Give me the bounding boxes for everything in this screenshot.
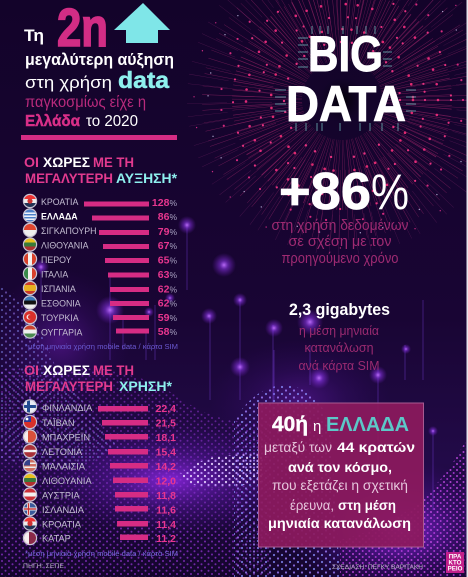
title (24, 0, 174, 130)
big data title (286, 26, 406, 132)
big data title: DATA (286, 76, 406, 132)
dotted wave: right hump (234, 385, 340, 577)
rank headline: 40ή (272, 413, 308, 436)
stat caption (272, 217, 408, 267)
rank description: 44 κρατών (337, 439, 415, 455)
dotted wave: lower left (0, 526, 240, 577)
title: παγκοσμίως είχε η (25, 94, 146, 111)
footnote: growth ranking: *μέση μηνιαία χρήση mobile data / κάρτα SIM (25, 342, 178, 351)
row: Italy (23, 266, 177, 281)
row: Taiwan (23, 415, 176, 430)
row: Italy: ΙΤΑΛΙΑ (41, 270, 68, 280)
row: Croatia: 128% (152, 197, 177, 209)
logo: ΡΕΙΟ (448, 566, 463, 572)
stat: plus 86 percent: % (371, 164, 409, 220)
source: ΠΗΓΗ: ΣΕΠΕ (23, 564, 64, 570)
row: Croatia: ΚΡΟΑΤΙΑ (41, 197, 78, 207)
rank description: που εξετάζει η σχετική (272, 477, 408, 493)
title: το 2020 (86, 113, 138, 130)
row: Lithuania: ΛΙΘΟΥΑΝΙΑ (42, 476, 92, 486)
heading: growth ranking: ΜΕΓΑΛΥΤΕΡΗ (25, 171, 113, 186)
heading: growth ranking: ΟΙ (24, 155, 39, 170)
row: Austria (23, 487, 176, 502)
row: Lithuania: 12,0 (156, 476, 176, 488)
row: Bahrain: ΜΠΑΧΡΕΪΝ (42, 432, 90, 442)
title: στη χρήση (25, 73, 112, 92)
heading: usage ranking: ΜΕ ΤΗ (93, 363, 134, 378)
row: Taiwan: 21,5 (156, 418, 176, 430)
row: Singapore: 79% (158, 226, 177, 238)
heading: growth ranking: ΑΥΞΗΣΗ* (116, 171, 178, 186)
icon: up arrow (114, 3, 170, 43)
row: Lithuania (23, 237, 177, 252)
row: Iceland: 11,6 (156, 504, 176, 516)
dotted wave: right rising (340, 440, 466, 577)
dotted wave: bright streak (180, 453, 262, 487)
starburst rays and dots (194, 0, 468, 248)
row: Italy: 63% (158, 269, 177, 281)
row: Iceland (23, 502, 176, 516)
gigabytes caption: η μέση μηνιαία (299, 323, 379, 338)
rank description: έρευνα, (290, 497, 334, 513)
rank description: μηνιαία κατανάλωση (268, 515, 411, 531)
title: data (118, 67, 169, 93)
title: Ελλάδα (25, 113, 80, 130)
chart: usage ranking (23, 399, 176, 545)
rank description (264, 439, 415, 531)
row: Croatia (23, 194, 177, 209)
row: Bahrain: 18,1 (156, 432, 176, 444)
heading: usage ranking: ΜΕΓΑΛΥΤΕΡΗ (25, 379, 113, 394)
row: Hungary (23, 324, 177, 339)
row: Lithuania: ΛΙΘΟΥΑΝΙΑ (41, 240, 89, 250)
row: Latvia (23, 444, 176, 458)
row: Turkey: 59% (158, 312, 177, 324)
row: Latvia: 15,4 (156, 446, 176, 458)
row: Turkey: ΤΟΥΡΚΙΑ (41, 313, 79, 323)
rank headline (272, 413, 409, 436)
dotted wave: left (0, 285, 120, 470)
rank description: μεταξύ των (264, 439, 332, 455)
row: Iceland: ΙΣΛΑΝΔΙΑ (42, 505, 85, 515)
gigabytes caption: κατανάλωση (304, 340, 374, 355)
row: Estonia (23, 295, 177, 310)
row: Bahrain (23, 429, 176, 444)
stat caption: στη χρήση δεδομένων (272, 217, 408, 234)
rank description: ανά τον κόσμο, (288, 459, 392, 475)
row: Hungary: ΟΥΓΓΑΡΙΑ (41, 328, 82, 338)
row: Lithuania (23, 473, 176, 488)
row: Qatar: 11,2 (156, 533, 176, 545)
row: Croatia: 11,4 (156, 519, 176, 531)
row: Malaysia: 14,2 (156, 461, 176, 473)
stat: plus 86 percent (279, 163, 409, 221)
row: Spain: 62% (158, 284, 177, 296)
row: Greece (23, 208, 177, 223)
footnote: usage ranking: *μέση μηνιαία χρήση mobile data / κάρτα SIM (25, 549, 178, 558)
light poles with orbs (33, 216, 438, 510)
row: Hungary: 58% (158, 326, 177, 338)
rank headline: ΕΛΛΑΔΑ (326, 414, 409, 436)
rank description: στη μέση (338, 497, 396, 513)
row: Spain: ΙΣΠΑΝΙΑ (41, 284, 76, 294)
row: Croatia (23, 516, 176, 531)
big data title: BIG (308, 26, 383, 82)
logo (446, 552, 464, 573)
rank headline: η (313, 418, 321, 435)
row: Singapore: ΣΙΓΚΑΠΟΥΡΗ (41, 226, 96, 236)
logo: ΠΡΑ (449, 554, 462, 560)
chart: growth ranking (23, 194, 177, 339)
row: Greece: ΕΛΛΑΔΑ (41, 212, 78, 222)
heading: growth ranking: ΜΕ ΤΗ (93, 155, 134, 170)
stat: plus 86 percent: +86 (279, 163, 371, 221)
row: Turkey (23, 310, 177, 324)
credit: ΣΧΕΔΙΑΣΗ: ΠΕΓΚΥ ΒΑΡΙΤΑΚΗ (332, 565, 423, 571)
stat caption: προηγούμενο χρόνο (282, 250, 398, 267)
row: Greece: 86% (158, 211, 177, 223)
row: Finland (23, 399, 176, 415)
row: Taiwan: ΤΑΪΒΑΝ (42, 418, 75, 428)
row: Qatar (23, 531, 176, 545)
row: Austria: 11,8 (156, 490, 176, 502)
stat: gigabytes: 2,3 gigabytes (289, 300, 390, 319)
row: Singapore (23, 223, 177, 238)
dark centre of burst (287, 45, 397, 155)
title: μεγαλύτερη αύξηση (25, 50, 174, 69)
row: Latvia: ΛΕΤΟΝΙΑ (42, 447, 83, 457)
logo: ΚΤΟ (449, 560, 462, 566)
row: Finland: ΦΙΝΛΑΝΔΙΑ (42, 403, 93, 413)
heading: growth ranking: ΧΩΡΕΣ (43, 155, 90, 170)
row: Finland: 22,4 (156, 403, 176, 415)
row: Peru: 65% (158, 254, 177, 266)
row: Malaysia: ΜΑΛΑΙΣΙΑ (42, 462, 86, 472)
row: Estonia: ΕΣΘΟΝΙΑ (41, 298, 81, 308)
title rule (21, 135, 177, 140)
row: Peru: ΠΕΡΟΥ (41, 255, 72, 265)
gigabytes caption (298, 323, 380, 373)
row: Austria: ΑΥΣΤΡΙΑ (42, 490, 81, 500)
heading: usage ranking: ΧΩΡΕΣ (43, 363, 90, 378)
row: Estonia: 62% (158, 298, 177, 310)
heading: usage ranking: ΟΙ (24, 363, 39, 378)
heading: growth ranking (24, 155, 178, 186)
row: Qatar: ΚΑΤΑΡ (42, 534, 71, 544)
circuit traces around big data (275, 26, 416, 131)
row: Lithuania: 67% (158, 240, 177, 252)
row: Malaysia (23, 458, 176, 473)
row: Croatia: ΚΡΟΑΤΙΑ (42, 520, 82, 530)
purple glow waves (0, 270, 468, 577)
title: Τη (24, 26, 44, 45)
heading: usage ranking (24, 363, 173, 394)
row: Spain (23, 281, 177, 296)
heading: usage ranking: ΧΡΗΣΗ* (119, 379, 173, 394)
gigabytes caption: ανά κάρτα SIM (298, 358, 380, 373)
row: Peru (23, 252, 177, 266)
stat caption: σε σχέση με τον (288, 233, 392, 250)
right edge strip (466, 0, 468, 577)
panel: ranking of Greece (258, 403, 424, 547)
dotted wave: centre band (0, 365, 270, 575)
